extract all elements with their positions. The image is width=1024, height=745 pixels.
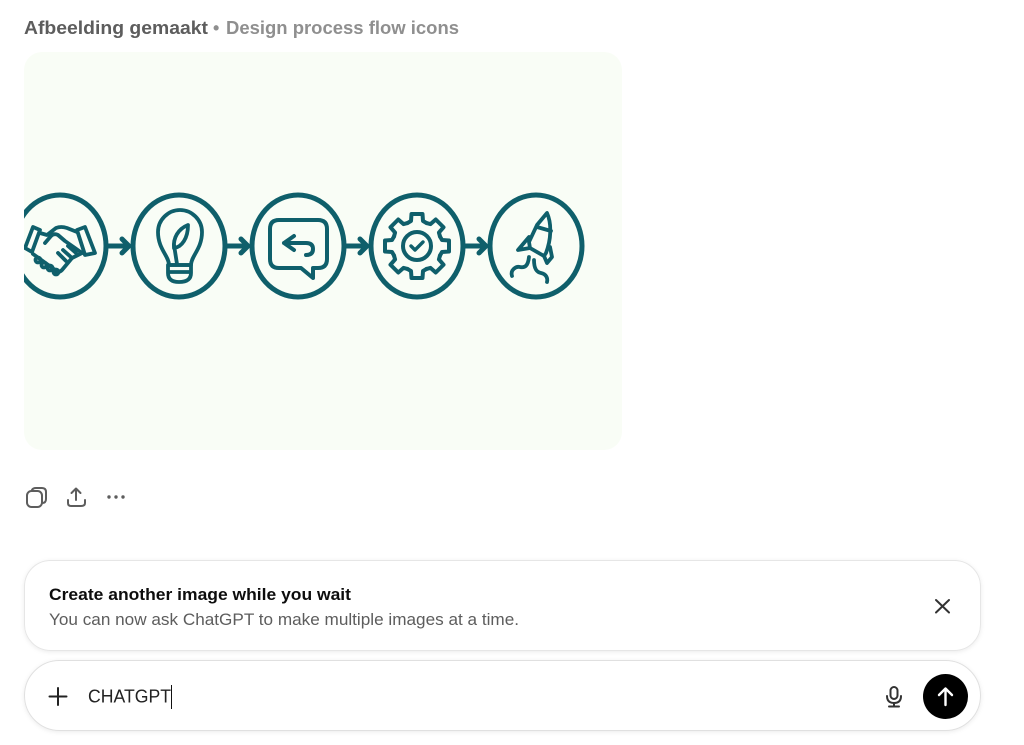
arrow 3 (346, 239, 367, 253)
icon: plus (50, 688, 66, 705)
icon: copy (27, 488, 46, 507)
arrow 4 (465, 239, 486, 253)
icon: handshake (14, 195, 106, 297)
input: prompt box (24, 660, 980, 730)
arrow 2 (227, 239, 248, 253)
icon: rocket (490, 195, 582, 297)
prompt text: CHATGPT (88, 686, 171, 706)
arrow 1 (108, 239, 129, 253)
text cursor (171, 685, 172, 709)
icon: close (936, 600, 949, 612)
icon: light bulb with leaf (133, 195, 225, 297)
heading: image created status: Design process flow icons (226, 18, 459, 38)
icon: share (68, 488, 85, 506)
icon: more dots (107, 495, 125, 499)
icon: speech bubble with return arrow (252, 195, 344, 297)
notice title: Create another image while you wait (49, 586, 352, 604)
heading: image created status: • (213, 18, 219, 38)
card: create another image notice (24, 560, 980, 650)
heading: image created status: Afbeelding gemaakt (24, 18, 208, 38)
heading: image created status (24, 18, 459, 38)
button: send (923, 674, 968, 719)
panel: generated image (14, 52, 622, 450)
process flow icons (14, 195, 582, 297)
icon: microphone (887, 687, 901, 706)
notice body: You can now ask ChatGPT to make multiple images at a time. (49, 611, 519, 629)
icon: gear with check (371, 195, 463, 297)
